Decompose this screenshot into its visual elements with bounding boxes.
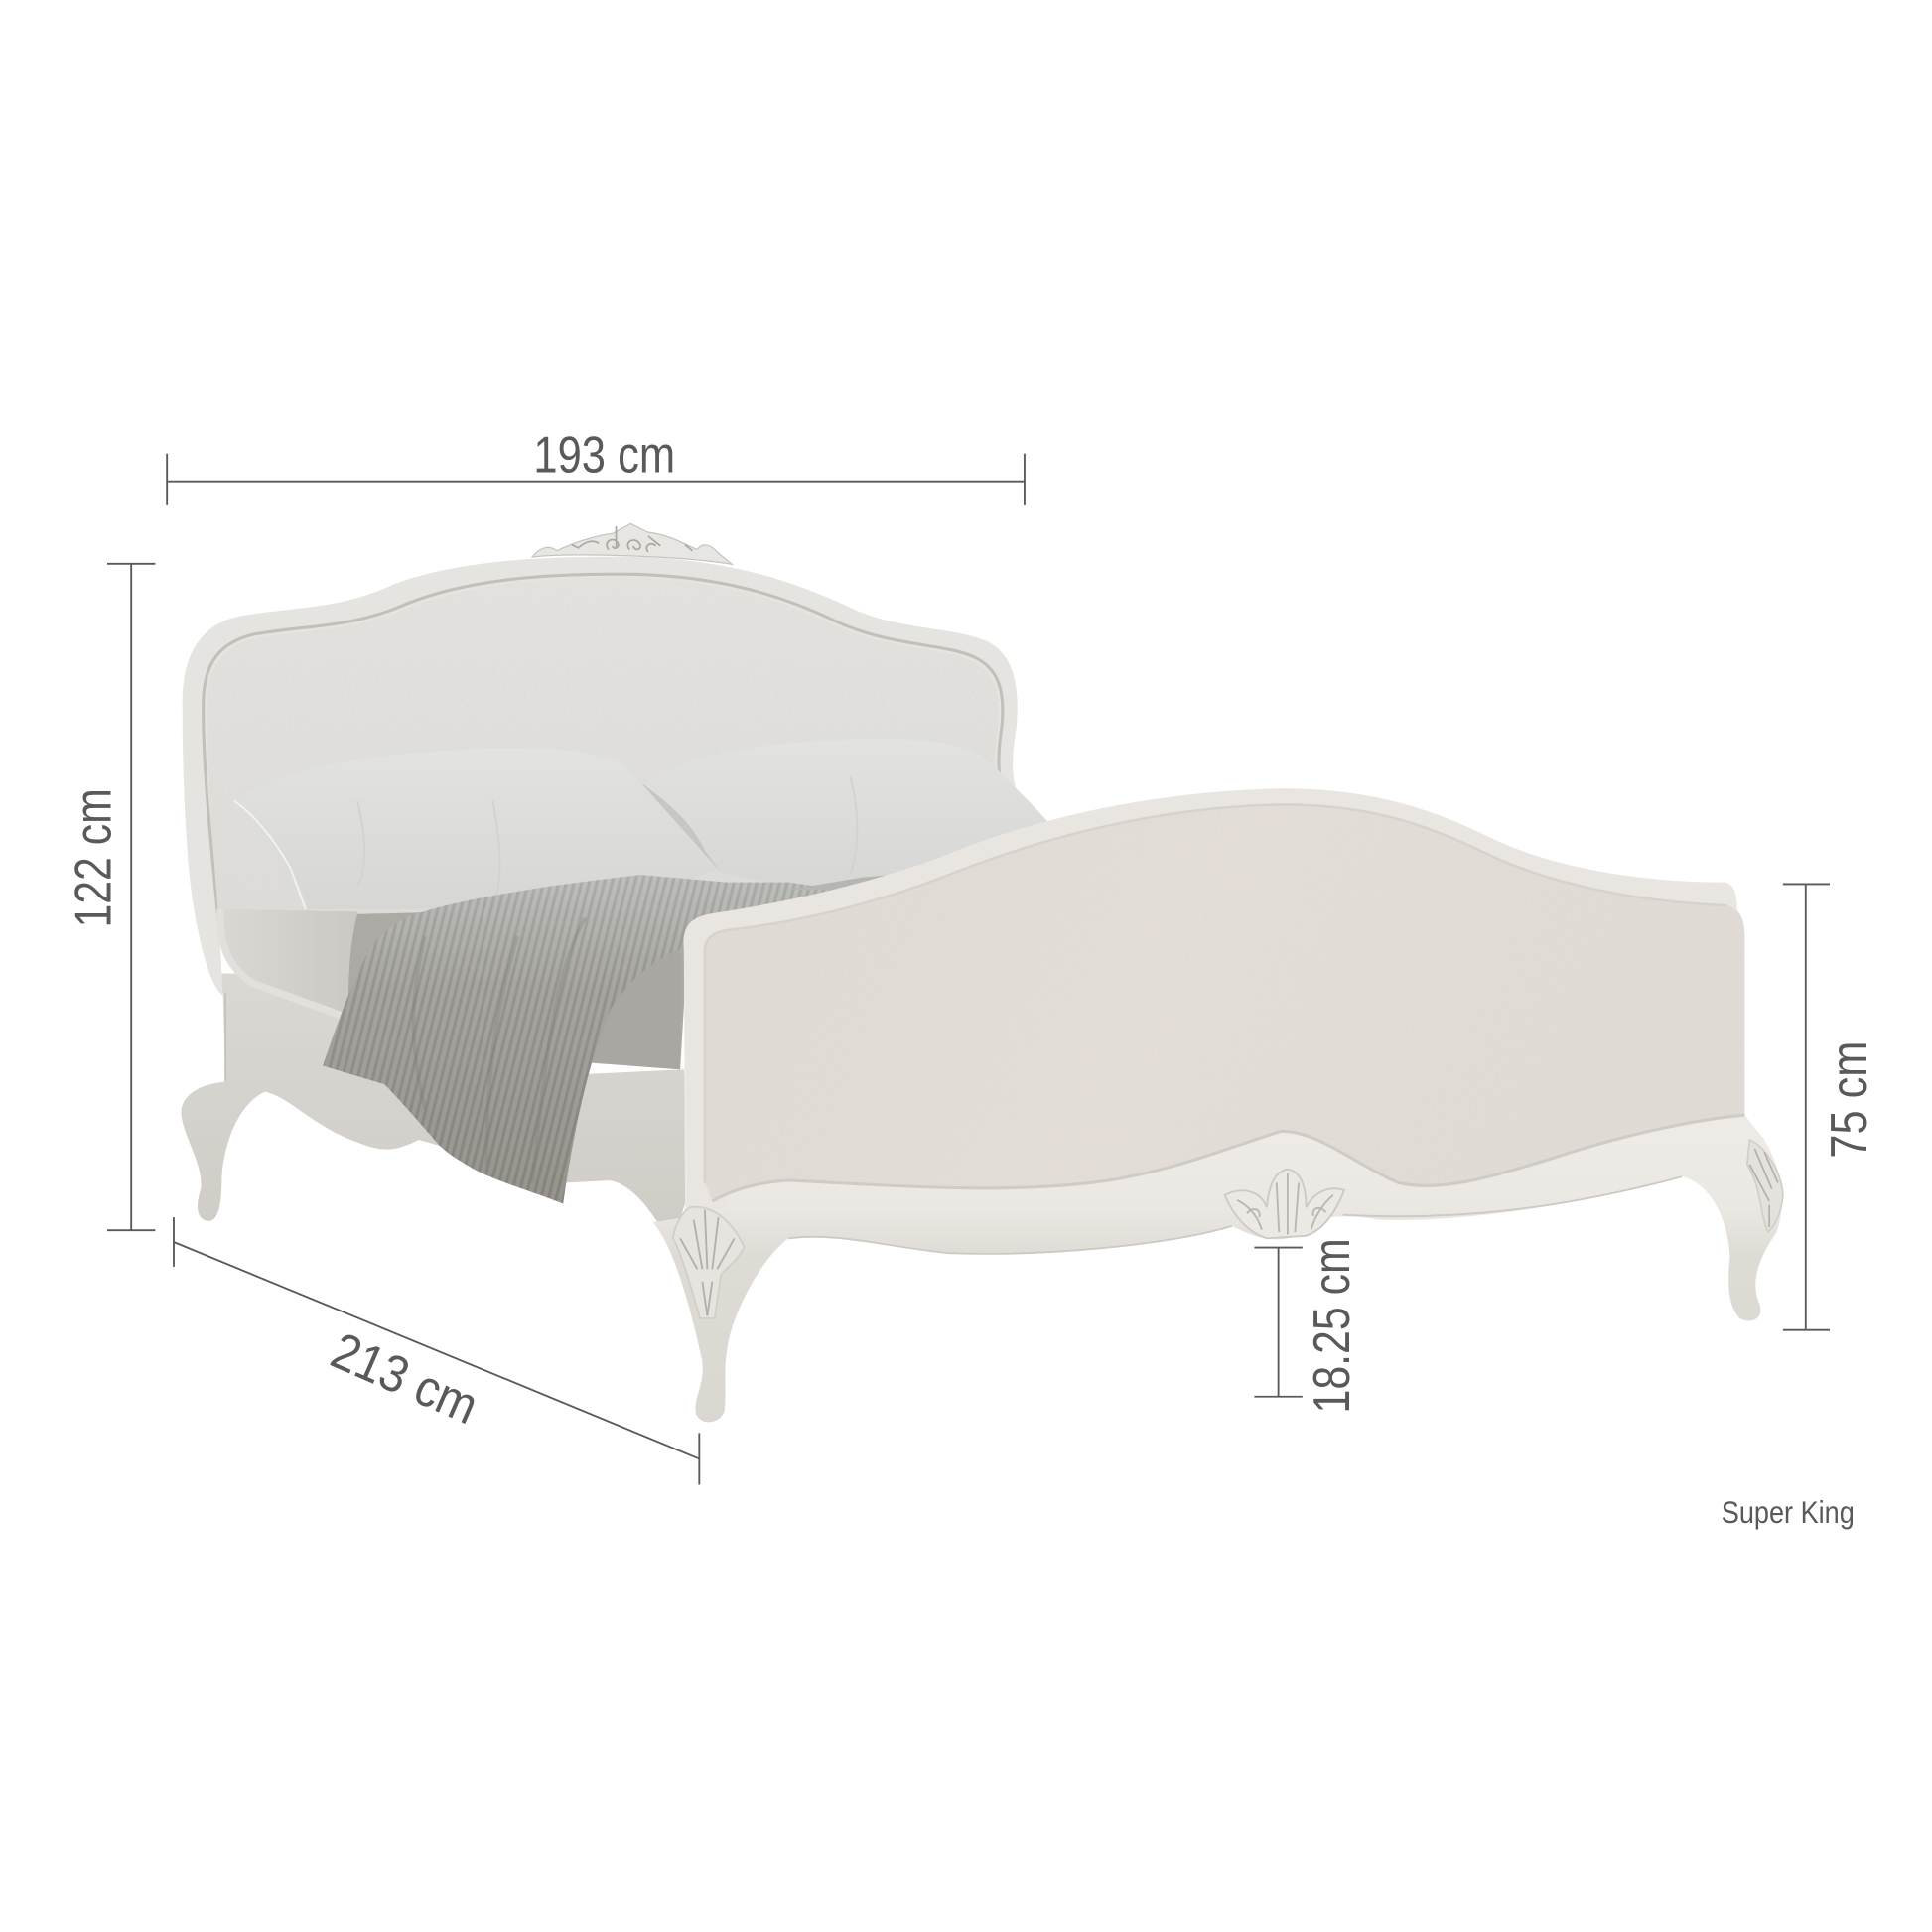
label: 213 cm: 213 cm (323, 1322, 486, 1436)
label: 122 cm: 122 cm (66, 788, 123, 928)
footboard (653, 788, 1783, 1422)
carved right leg shell (1747, 1140, 1783, 1232)
label: 193 cm: 193 cm (533, 426, 675, 483)
footboard height dimension line (1783, 884, 1878, 1330)
light sheet (219, 909, 369, 1023)
headboard upholstery (207, 578, 1013, 926)
knitted throw (323, 873, 918, 1204)
footboard piping (712, 1115, 1744, 1201)
carved left leg shell (673, 1207, 745, 1318)
left pillow (234, 748, 717, 909)
rear left leg and side rail (181, 973, 696, 1244)
headboard frame (183, 557, 1029, 996)
label: 18.25 cm: 18.25 cm (1304, 1238, 1361, 1414)
headboard (183, 523, 1029, 996)
sheet edge moulding (220, 909, 351, 1019)
footboard base, rail and legs (653, 936, 1782, 1422)
footboard top frame (683, 788, 1744, 1213)
under-bed clearance dimension line (1254, 1238, 1361, 1414)
headboard inner moulding (204, 574, 1017, 930)
darker sheet (348, 905, 690, 1069)
overall height dimension line (66, 564, 155, 1230)
label: 75 cm: 75 cm (1821, 1041, 1878, 1159)
length dimension line (174, 1217, 699, 1484)
right pillow (640, 739, 1053, 890)
rail lower edge shadow (788, 1176, 1682, 1254)
footboard upholstery (705, 804, 1744, 1201)
width dimension line (167, 426, 1025, 505)
size caption: Super King (1722, 1495, 1855, 1530)
bed illustration (181, 523, 1783, 1422)
carved centre shell (1225, 1170, 1344, 1238)
mattress and sheets (219, 905, 690, 1069)
headboard crest carving (532, 523, 732, 564)
